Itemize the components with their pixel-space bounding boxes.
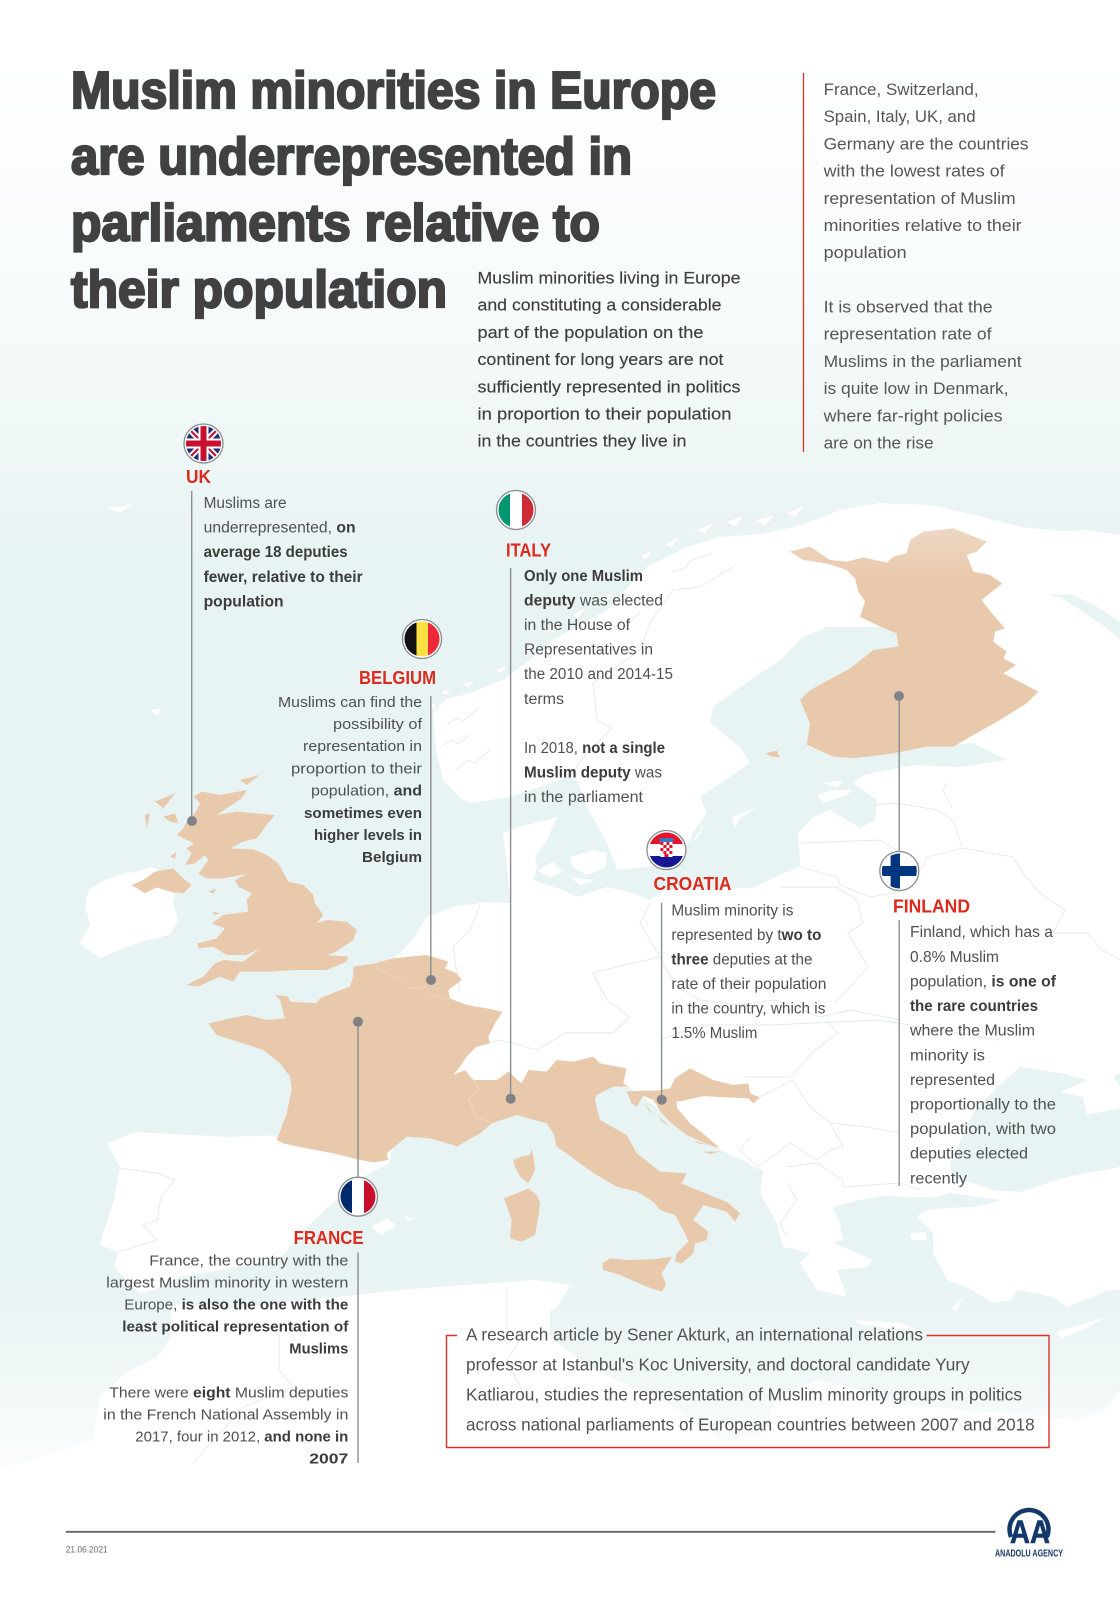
panel: Italy: the 2010 and 2014-15: [524, 666, 673, 683]
panel: Croatia: in the country, which is: [671, 1001, 826, 1018]
highlighted country: France and Belgium: [208, 955, 503, 1162]
callout: research article box: across national parliaments of European countries between 2007 and 2018: [466, 1415, 1035, 1435]
right column text with red rule: where far-right policies: [823, 406, 1003, 425]
panel: Italy: Muslim deputy was: [524, 765, 662, 782]
panel: UK: fewer, relative to their: [204, 569, 363, 586]
panel: Finland: population, is one of: [910, 974, 1057, 990]
panel: UK: Muslims are: [204, 495, 287, 512]
panel: France: 2017, four in 2012, and none in: [135, 1428, 348, 1446]
right column text with red rule: representation rate of: [824, 325, 992, 344]
right column text with red rule: It is observed that the: [824, 298, 993, 316]
panel: Finland: deputies elected: [910, 1146, 1028, 1163]
right column text with red rule: minorities relative to their: [824, 216, 1022, 235]
right column text with red rule: [804, 73, 1029, 452]
panel: Italy: [496, 490, 673, 1104]
intro text: part of the population on the: [478, 323, 704, 342]
panel: France: FRANCE: [294, 1228, 364, 1248]
panel: Finland: recently: [910, 1170, 967, 1187]
intro text: continent for long years are not: [478, 350, 724, 369]
title: Muslim minorities in Europe: [71, 62, 716, 120]
panel: Italy: terms: [524, 691, 564, 708]
panel: Belgium: higher levels in: [314, 827, 422, 844]
icon: Croatia flag: [647, 830, 686, 870]
panel: UK: average 18 deputies: [204, 544, 348, 561]
panel: Italy: Representatives in: [524, 642, 653, 659]
panel: Finland: where the Muslim: [909, 1023, 1035, 1040]
logo: Anadolu Agency: [995, 1510, 1063, 1560]
panel: France: 2007: [309, 1450, 348, 1468]
panel: Finland: population, with two: [910, 1121, 1056, 1138]
right column text with red rule: Germany are the countries: [824, 134, 1029, 153]
panel: France: There were eight Muslim deputies: [109, 1384, 348, 1402]
callout: research article box: [446, 1325, 1049, 1448]
panel: Finland: proportionally to the: [910, 1096, 1056, 1114]
panel: Finland: FINLAND: [893, 897, 970, 917]
footer rule: [66, 1531, 995, 1533]
panel: Croatia: 1.5% Muslim: [671, 1025, 757, 1042]
panel: Finland: [880, 691, 1057, 1187]
highlighted country: Finland: [765, 528, 1038, 758]
panel: Finland: 0.8% Muslim: [910, 949, 999, 966]
right column text with red rule: population: [824, 243, 907, 262]
panel: Belgium: possibility of: [333, 716, 423, 733]
panel: Finland: the rare countries: [910, 998, 1038, 1015]
intro text: and constituting a considerable: [478, 296, 722, 315]
panel: Italy: ITALY: [506, 540, 551, 560]
panel: UK: [184, 424, 363, 826]
callout: research article box: Katliarou, studies the representation of Muslim minority groups in politics: [466, 1385, 1022, 1405]
panel: Belgium: BELGIUM: [359, 668, 436, 688]
right column text with red rule: France, Switzerland,: [824, 80, 979, 99]
panel: France: France, the country with the: [149, 1252, 348, 1270]
panel: UK: underrepresented, on: [204, 520, 356, 537]
right column text with red rule: Spain, Italy, UK, and: [824, 107, 976, 126]
panel: Croatia: three deputies at the: [671, 952, 812, 969]
panel: Belgium: [278, 620, 442, 985]
intro text: in proportion to their population: [478, 404, 732, 424]
panel: Finland: represented: [910, 1072, 995, 1089]
panel: France: in the French National Assembly in: [103, 1406, 348, 1424]
panel: Croatia: [647, 830, 826, 1105]
panel: Italy: In 2018, not a single: [524, 740, 665, 757]
panel: Belgium: proportion to their: [291, 760, 422, 777]
panel: Italy: in the House of: [524, 617, 631, 634]
panel: Italy: in the parliament: [524, 789, 644, 806]
panel: France: least political representation of: [122, 1318, 349, 1336]
right column text with red rule: is quite low in Denmark,: [824, 379, 1009, 398]
highlighted country: Italy, Corsica, Sardinia, Sicily and Croatia: [468, 1057, 760, 1292]
panel: Belgium: Muslims can find the: [278, 694, 422, 711]
intro text: in the countries they live in: [478, 432, 686, 451]
callout: research article box: A research article by Sener Akturk, an international relations: [466, 1325, 923, 1345]
logo: Anadolu Agency: ANADOLU AGENCY: [995, 1549, 1063, 1560]
panel: Italy: deputy was elected: [524, 592, 663, 610]
intro text: sufficiently represented in politics: [478, 377, 740, 396]
panel: France: Europe, is also the one with the: [124, 1296, 348, 1314]
right column text with red rule: representation of Muslim: [824, 189, 1016, 208]
panel: Croatia: Muslim minority is: [671, 902, 794, 920]
logo: Anadolu Agency: AA: [1010, 1514, 1050, 1550]
panel: Finland: minority is: [910, 1047, 985, 1064]
panel: Belgium: Belgium: [362, 849, 422, 866]
panel: Belgium: sometimes even: [304, 805, 422, 822]
intro text: Muslim minorities living in Europe: [478, 268, 740, 288]
title: their population: [71, 261, 447, 319]
panel: Belgium: population, and: [311, 783, 422, 800]
icon: France flag: [338, 1177, 378, 1216]
panel: UK: UK: [186, 467, 211, 487]
intro text: [478, 268, 740, 451]
panel: Finland: Finland, which has a: [910, 924, 1053, 941]
panel: France: Muslims: [289, 1340, 348, 1358]
highlighted country: United Kingdom: [132, 775, 357, 987]
icon: Belgium flag: [402, 620, 442, 658]
panel: France: largest Muslim minority in western: [106, 1274, 348, 1292]
title: are underrepresented in: [71, 128, 632, 186]
panel: Belgium: representation in: [303, 738, 422, 755]
title: [71, 62, 716, 319]
panel: Croatia: rate of their population: [671, 976, 826, 993]
right column text with red rule: Muslims in the parliament: [824, 352, 1022, 371]
icon: UK flag: [184, 424, 223, 463]
panel: UK: population: [204, 593, 284, 610]
panel: Croatia: CROATIA: [654, 874, 732, 894]
title: parliaments relative to: [71, 194, 600, 252]
icon: Italy flag: [496, 490, 536, 530]
right column text with red rule: are on the rise: [824, 434, 934, 452]
panel: Croatia: represented by two to: [671, 927, 821, 944]
panel: Italy: Only one Muslim: [524, 568, 643, 585]
right column text with red rule: with the lowest rates of: [823, 162, 1005, 181]
callout: research article box: professor at Istanbul's Koc University, and doctoral candidate Yury: [466, 1355, 970, 1375]
panel: France: [103, 1017, 378, 1468]
icon: Finland flag: [880, 852, 919, 890]
date: 21.06.2021: [66, 1544, 108, 1556]
